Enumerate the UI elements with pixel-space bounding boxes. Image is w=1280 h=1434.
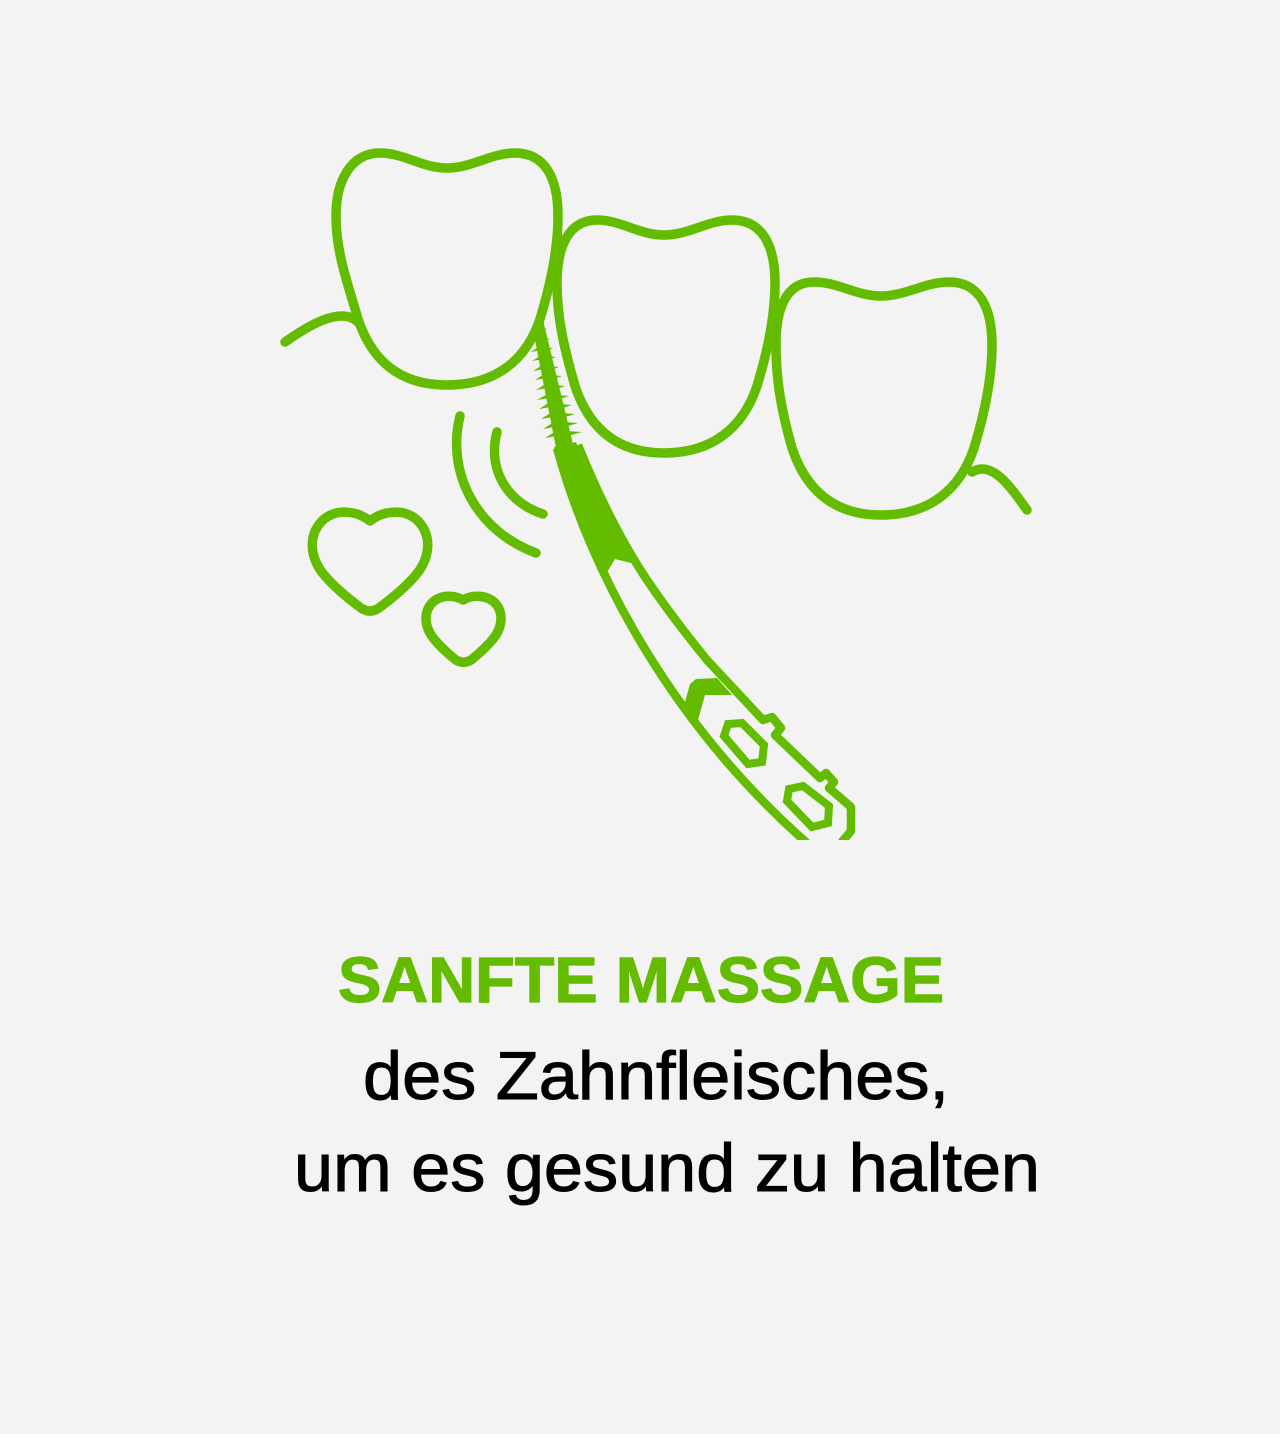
text line 1: des Zahnfleisches, (363, 1038, 949, 1114)
handle hole lower (787, 786, 829, 827)
illustration: teeth, gums, arcs and hearts (285, 153, 1027, 662)
motion arc large (457, 416, 536, 553)
tooth left (336, 153, 558, 385)
heart small (426, 596, 501, 662)
text line 2: um es gesund zu halten (294, 1130, 1040, 1206)
handle outline (557, 448, 807, 843)
heading: SANFTE MASSAGE (338, 944, 944, 1016)
gum line right (972, 469, 1027, 510)
gum line left (285, 316, 358, 342)
motion arc small (495, 432, 543, 514)
tooth middle (557, 220, 775, 453)
heart large (312, 512, 428, 611)
brush bristles (531, 327, 582, 438)
brush neck wedge (554, 442, 633, 578)
brush wire (535, 320, 573, 448)
handle notch (685, 678, 732, 720)
handle hole upper (724, 723, 764, 764)
interdental brush (531, 320, 851, 843)
tooth right (776, 282, 992, 515)
